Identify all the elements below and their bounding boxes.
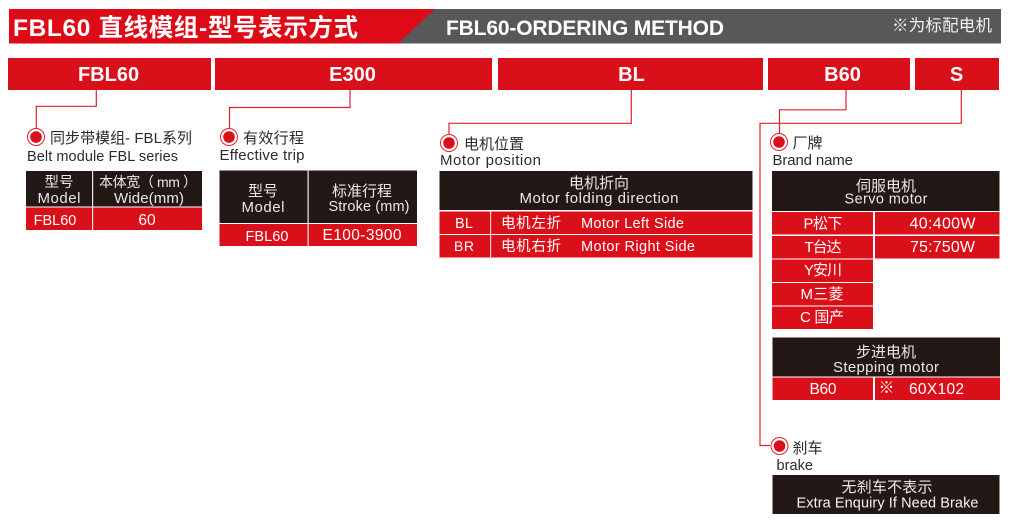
- code bar: E300: [215, 58, 492, 90]
- table: stroke: Model: [242, 199, 284, 216]
- table: servo motor: C 国产: [800, 309, 844, 326]
- table: stepping motor: 步进电机: [856, 344, 916, 361]
- table: model and width: Model: [38, 190, 80, 207]
- connector: B60 to brand name: [780, 90, 846, 135]
- section label: motor position: Motor position: [440, 152, 541, 169]
- code bar: BL: [498, 58, 763, 90]
- table: model and width: 60: [138, 212, 156, 229]
- section label: effective trip: [220, 128, 304, 164]
- icon: bullet: [771, 438, 788, 454]
- table: model and width: Wide(mm): [114, 190, 184, 207]
- table: model and width: [26, 171, 202, 230]
- table: brake note: Extra Enquiry If Need Brake: [796, 496, 978, 512]
- section label: belt module: [27, 128, 192, 165]
- table: motor folding direction: BL: [455, 216, 473, 232]
- icon: bullet: [440, 134, 458, 152]
- table: brake note: [772, 475, 1000, 514]
- title: English: FBL60-ORDERING METHOD: [446, 17, 724, 40]
- icon: bullet: [770, 134, 788, 150]
- table: motor folding direction: BR: [454, 238, 474, 254]
- table: servo motor: Y安川: [804, 262, 842, 279]
- table: motor folding direction: [440, 171, 752, 258]
- table: motor folding direction: 电机左折: [501, 215, 561, 232]
- section label: brand name: Brand name: [772, 152, 853, 169]
- table: servo motor: T台达: [804, 239, 842, 256]
- section label: brake: [771, 438, 822, 474]
- table: stepping motor: ※: [878, 380, 895, 397]
- code bar: S: [915, 58, 999, 90]
- code bar: FBL60: FBL60: [78, 64, 139, 86]
- table: servo motor: P松下: [804, 216, 842, 232]
- table: stepping motor: Stepping motor: [833, 359, 939, 376]
- table: motor folding direction: Motor folding direction: [520, 190, 678, 207]
- table: servo motor: M三菱: [800, 286, 844, 303]
- table: model and width: 型号: [44, 174, 74, 191]
- code bar: B60: B60: [824, 64, 861, 86]
- section label: belt module: 同步带模组- FBL系列: [50, 130, 192, 147]
- table: stepping motor: [772, 338, 1000, 400]
- code bar: BL: BL: [618, 64, 645, 86]
- note: standard motor: ※为标配电机: [892, 16, 992, 35]
- table: servo motor: 75:750W: [910, 239, 976, 256]
- section label: effective trip: 有效行程: [243, 130, 304, 147]
- code bar: B60: [768, 58, 910, 90]
- table: model and width: 本体宽（ mm ）: [99, 174, 197, 190]
- section label: brake: brake: [776, 458, 813, 474]
- table: stroke: E100-3900: [322, 227, 402, 244]
- connector: S to brake: [760, 90, 961, 446]
- section label: motor position: [440, 134, 541, 169]
- section label: motor position: 电机位置: [464, 136, 524, 153]
- table: brake note: 无刹车不表示: [842, 479, 932, 496]
- table: motor folding direction: 电机折向: [569, 175, 629, 192]
- section label: brand name: [770, 134, 853, 169]
- section label: brake: 刹车: [792, 440, 822, 457]
- code bar: E300: E300: [329, 64, 376, 86]
- connector: E300 to effective trip: [230, 90, 350, 130]
- connector: BL to motor position: [449, 90, 631, 136]
- code bar: S: S: [950, 64, 963, 86]
- table: motor folding direction: Motor Right Side: [581, 239, 695, 255]
- table: stepping motor: B60: [810, 381, 837, 398]
- icon: bullet: [28, 128, 44, 146]
- table: stroke: 标准行程: [332, 183, 392, 200]
- table: model and width: FBL60: [34, 213, 76, 229]
- title: Chinese: FBL60 直线模组-型号表示方式: [13, 13, 358, 42]
- code bar: FBL60: [8, 58, 211, 90]
- section label: effective trip: Effective trip: [220, 147, 304, 164]
- table: servo motor: [772, 171, 1000, 329]
- table: stroke: Stroke (mm): [328, 199, 410, 215]
- connector: FBL60 to belt module: [36, 90, 96, 130]
- table: stepping motor: 60X102: [909, 381, 964, 398]
- section label: belt module: Belt module FBL series: [27, 149, 178, 165]
- table: stroke: 型号: [248, 183, 278, 200]
- table: motor folding direction: Motor Left Side: [581, 216, 684, 232]
- table: stroke: FBL60: [246, 229, 288, 245]
- title banner: [9, 9, 1001, 44]
- table: stroke: [220, 170, 417, 246]
- table: servo motor: 伺服电机: [856, 178, 916, 195]
- section label: brand name: 厂牌: [792, 135, 822, 152]
- table: motor folding direction: 电机右折: [501, 238, 561, 255]
- icon: bullet: [220, 128, 238, 146]
- table: servo motor: 40:400W: [910, 216, 976, 232]
- table: servo motor: Servo motor: [844, 192, 928, 208]
